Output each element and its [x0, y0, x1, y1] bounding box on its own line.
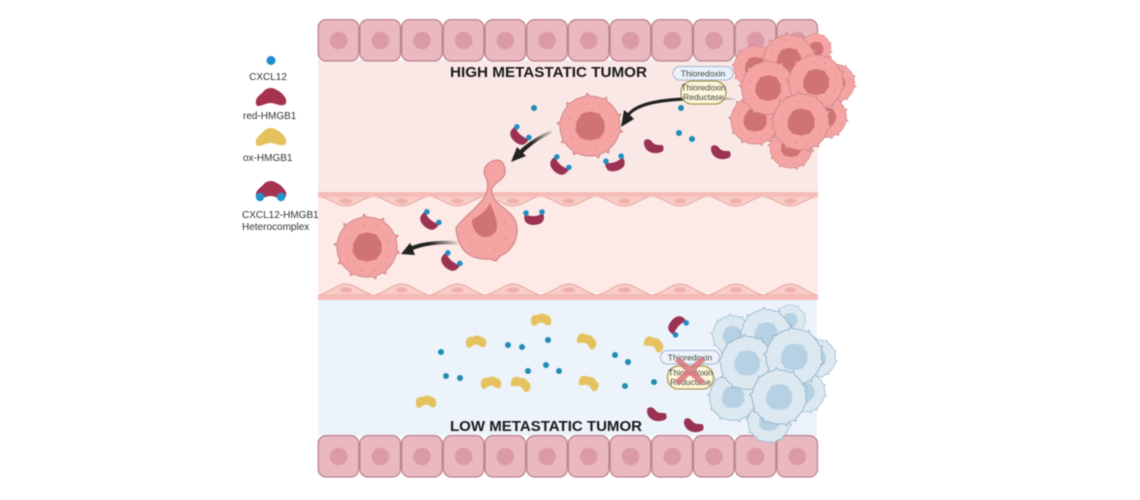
migrating tumor cell, tissue [557, 93, 622, 158]
legend: red-HMGB1 [243, 88, 297, 122]
legend: heterocomplex [242, 181, 319, 233]
red-HMGB1 molecules, high [644, 139, 731, 159]
thioredoxin reductase, low [668, 366, 714, 389]
arrow: out of extravasating cell [401, 241, 458, 255]
legend: ox-HMGB1 [243, 128, 293, 164]
thioredoxin pill, high: Thioredoxin [681, 68, 725, 78]
extravasating tumor cell [456, 160, 517, 261]
thioredoxin pill, high [673, 66, 733, 80]
heading: high metastatic tumor: HIGH METASTATIC TUMOR [450, 65, 648, 81]
heterocomplexes [416, 122, 627, 275]
legend: heterocomplex: CXCL12-HMGB1 [242, 210, 319, 221]
panel: blood vessel lumen [318, 197, 818, 293]
red X inhibition mark [677, 359, 703, 383]
thioredoxin reductase, high: Thioredoxin [681, 82, 726, 92]
low metastatic tumor cluster [707, 304, 837, 443]
heterocomplex, low [664, 312, 691, 339]
legend: CXCL12 [249, 56, 287, 83]
thioredoxin pill, low [660, 350, 720, 364]
high metastatic tumor cluster [729, 32, 856, 169]
upper vessel wall [318, 192, 818, 206]
heading: low metastatic tumor: LOW METASTATIC TUMOR [450, 419, 643, 435]
panel: high metastatic tissue background [318, 60, 818, 193]
lower vessel wall [318, 284, 818, 300]
tumor cell in vessel [334, 214, 400, 279]
legend: red-HMGB1: red-HMGB1 [243, 111, 297, 122]
thioredoxin reductase, low: Reductase [670, 377, 711, 387]
red-HMGB1 molecules, low [647, 407, 704, 432]
legend: ox-HMGB1: ox-HMGB1 [243, 153, 293, 164]
thioredoxin reductase, high: Reductase [683, 92, 724, 102]
thioredoxin pill, low: Thioredoxin [668, 352, 712, 362]
legend: heterocomplex: Heterocomplex [242, 222, 309, 233]
arrow: from tumor to migrating cell [621, 97, 735, 127]
legend [242, 56, 319, 233]
legend: CXCL12: CXCL12 [249, 72, 287, 83]
CXCL12 dots, low [438, 337, 657, 389]
thioredoxin reductase, high [681, 81, 726, 104]
top epithelial cell row [318, 20, 817, 61]
arrow: toward extravasating cell [511, 130, 552, 162]
panel: low metastatic tissue background [318, 300, 817, 436]
ox-HMGB1 molecules [416, 314, 666, 408]
thioredoxin reductase, low: Thioredoxin [668, 368, 713, 378]
bottom epithelial cell row [318, 436, 817, 477]
CXCL12 dots, high [531, 105, 695, 142]
